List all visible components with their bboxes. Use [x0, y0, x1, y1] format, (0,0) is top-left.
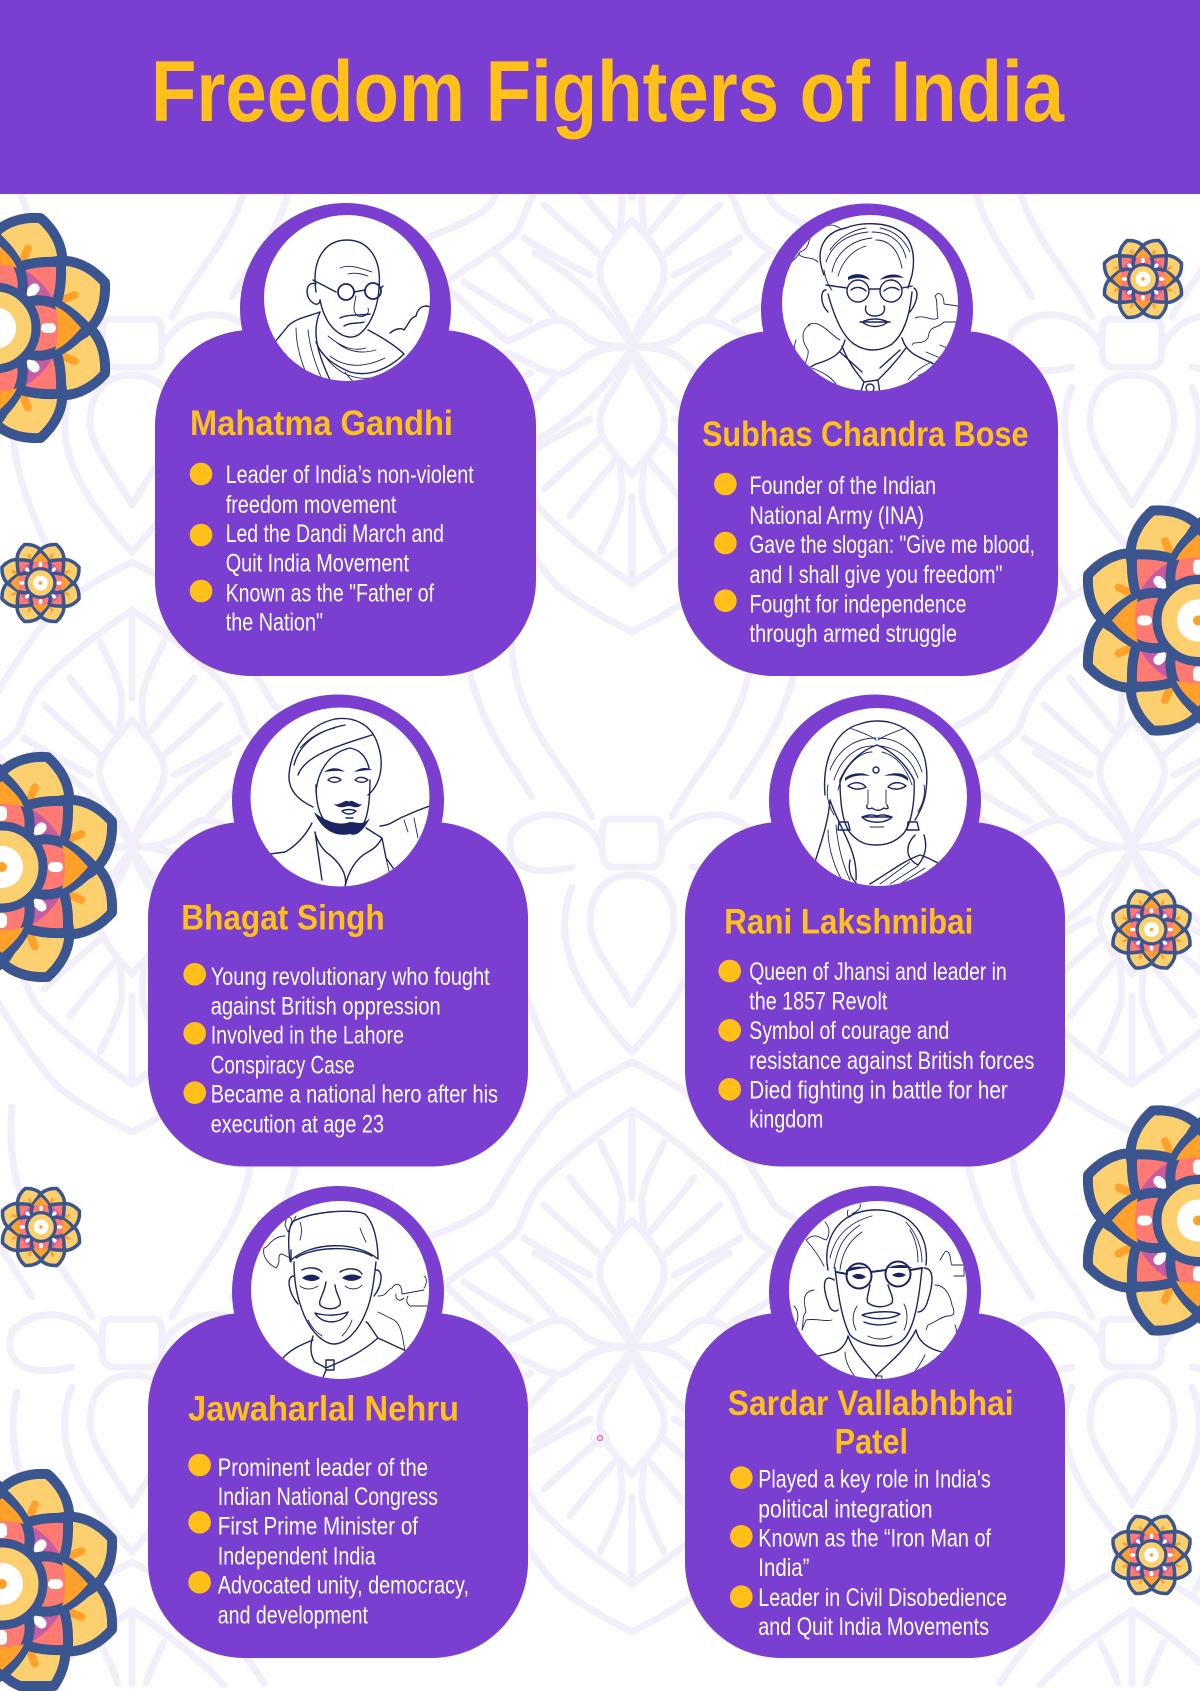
bullet list — [730, 1465, 1007, 1641]
bullet list: Young revolutionary who fought — [211, 963, 490, 991]
portrait: Mahatma Gandhi — [264, 215, 432, 392]
bullet list: Founder of the Indian — [750, 472, 936, 500]
small pink ring marker — [592, 1430, 608, 1446]
card shape — [685, 694, 1065, 1166]
bullet list: against British oppression — [211, 992, 441, 1020]
bullet list — [183, 963, 498, 1138]
bullet list: Independent India — [218, 1543, 376, 1571]
bullet list: the Nation" — [226, 609, 323, 637]
panel: Subhas Chandra Bose — [678, 204, 1058, 676]
bullet list: Fought for independence — [750, 590, 966, 618]
panel: Mahatma Gandhi — [155, 203, 536, 676]
portrait: Subhas Chandra Bose — [782, 215, 958, 394]
bullet list: Became a national hero after his — [211, 1081, 498, 1109]
name heading: Subhas Chandra Bose — [702, 415, 1028, 454]
bullet list: Leader in Civil Disobedience — [758, 1584, 1007, 1612]
card shape — [678, 204, 1058, 676]
header banner — [0, 0, 1200, 194]
bullet list — [188, 1454, 469, 1629]
name heading: Rani Lakshmibai — [724, 902, 973, 941]
name heading: Sardar Vallabhbhai — [728, 1384, 1014, 1423]
bullet list: execution at age 23 — [211, 1110, 384, 1138]
icon: small flower right top — [1099, 235, 1187, 323]
panel: Jawaharlal Nehru — [148, 1186, 528, 1658]
portrait: Sardar Vallabhbhai Patel — [789, 1201, 967, 1392]
panel: Sardar Vallabhbhai Patel — [685, 1186, 1065, 1658]
bullet list: Leader of India’s non-violent — [226, 461, 474, 489]
portrait: Jawaharlal Nehru — [251, 1201, 429, 1382]
bullet list: Conspiracy Case — [211, 1051, 355, 1079]
icon: small flower right bottom — [1108, 1511, 1195, 1599]
bullet list: National Army (INA) — [750, 502, 924, 530]
icon: large flower left top — [0, 203, 120, 453]
bullet list: Prominent leader of the — [218, 1454, 428, 1482]
bullet list: Queen of Jhansi and leader in — [749, 958, 1007, 986]
icon: small flower left upper — [0, 539, 84, 627]
bullet list: and I shall give you freedom" — [750, 561, 1002, 589]
bullet list — [714, 472, 1035, 648]
bullet list: Played a key role in India's — [758, 1465, 991, 1493]
bullet list: Known as the "Father of — [226, 580, 434, 608]
bullet list: and Quit India Movements — [758, 1613, 989, 1641]
bullet list: Known as the “Iron Man of — [758, 1525, 991, 1553]
bullet list: Involved in the Lahore — [211, 1021, 404, 1049]
card shape — [155, 203, 536, 676]
bullet list: and development — [218, 1601, 368, 1629]
portrait: Rani Lakshmibai — [789, 708, 967, 886]
name heading second line: Patel — [835, 1422, 908, 1461]
bullet list: resistance against British forces — [749, 1047, 1034, 1075]
bullet list: Quit India Movement — [226, 550, 409, 578]
portrait: Bhagat Singh — [250, 708, 430, 887]
bullet list: freedom movement — [226, 491, 396, 519]
bullet list — [190, 461, 474, 637]
icon: large flower right middle — [1073, 495, 1200, 746]
icon: large flower left middle — [0, 742, 127, 992]
name heading: Bhagat Singh — [181, 898, 385, 937]
bullet list: Gave the slogan: "Give me blood, — [750, 531, 1035, 559]
title: Freedom Fighters of India — [151, 44, 1065, 140]
icon: large flower left bottom — [0, 1459, 127, 1686]
bullet list: Indian National Congress — [218, 1483, 438, 1511]
card shape — [148, 1186, 528, 1658]
icon: small flower left lower — [0, 1183, 85, 1271]
bullet list: political integration — [758, 1495, 933, 1523]
bullet list: the 1857 Revolt — [749, 987, 887, 1015]
panel: Rani Lakshmibai — [685, 694, 1065, 1166]
bullet list: First Prime Minister of — [218, 1513, 418, 1541]
name heading: Mahatma Gandhi — [190, 404, 453, 443]
icon: small flower right middle — [1108, 886, 1195, 973]
card shape — [148, 694, 528, 1166]
bullet list: Led the Dandi March and — [226, 520, 444, 548]
bullet list: India” — [758, 1554, 809, 1582]
bullet list: kingdom — [749, 1106, 823, 1134]
card shape — [685, 1186, 1065, 1658]
bullet list: Died fighting in battle for her — [749, 1076, 1008, 1104]
bullet list — [718, 958, 1034, 1134]
bullet list: through armed struggle — [750, 620, 957, 648]
name heading: Jawaharlal Nehru — [188, 1390, 459, 1429]
panel: Bhagat Singh — [148, 694, 528, 1166]
bullet list: Advocated unity, democracy, — [218, 1571, 469, 1599]
bullet list: Symbol of courage and — [749, 1017, 949, 1045]
icon: large flower right bottom — [1073, 1095, 1200, 1346]
